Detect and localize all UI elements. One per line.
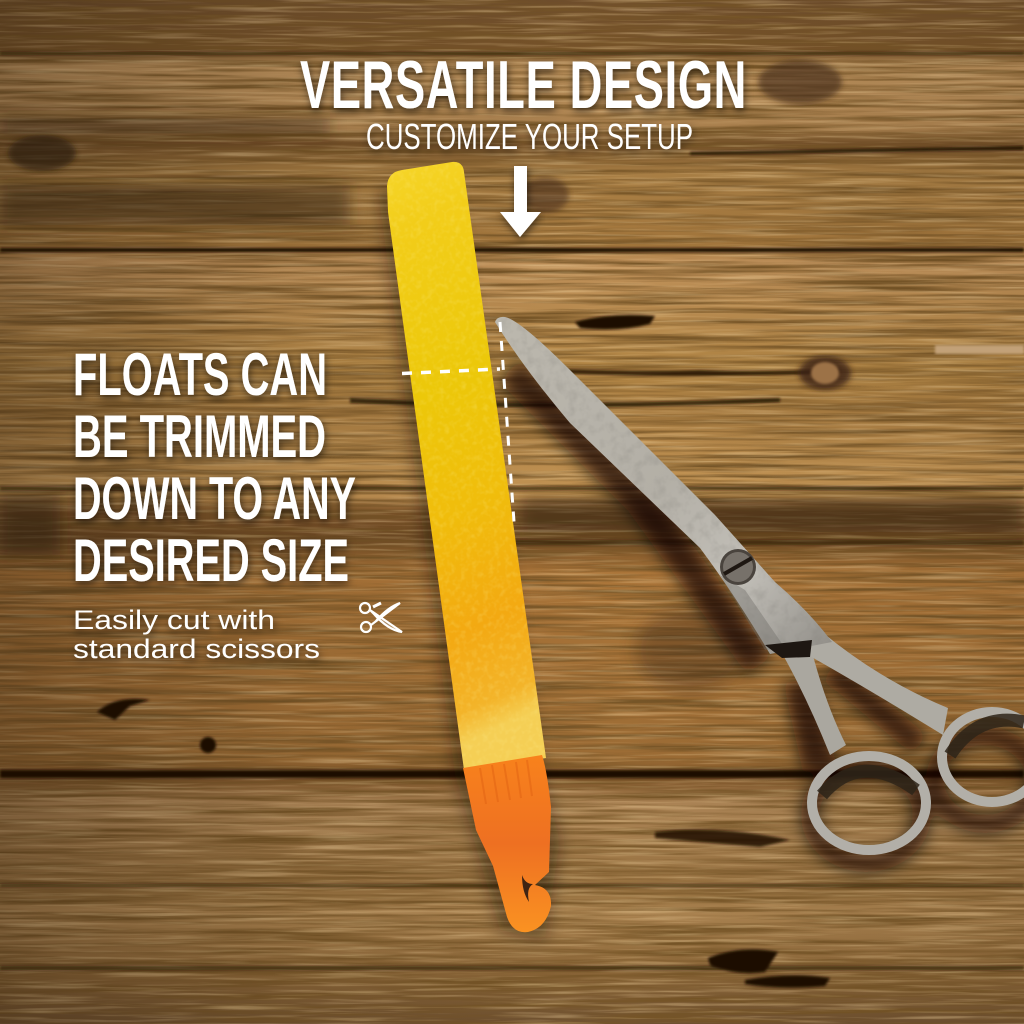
ring handle left [812, 756, 926, 850]
foam body [387, 162, 546, 770]
arrow pointing down [500, 166, 541, 237]
dark underside [765, 640, 812, 658]
scissors [495, 317, 1024, 850]
icon: scissors [360, 603, 402, 632]
lower handle [783, 652, 846, 755]
supporting text: standard scissors [73, 634, 320, 664]
main text block: DOWN TO ANY [73, 465, 356, 532]
float shadow [378, 175, 560, 940]
blade texture [495, 317, 832, 654]
ring handle right [942, 712, 1024, 802]
upper handle [775, 632, 948, 735]
main text block: DESIRED SIZE [73, 527, 349, 594]
subtitle: CUSTOMIZE YOUR SETUP [366, 116, 693, 157]
main text block: BE TRIMMED [73, 403, 326, 470]
main text block [73, 341, 356, 594]
title: VERSATILE DESIGN [300, 47, 747, 123]
foam texture [387, 162, 546, 770]
dashed vertical guide line [500, 322, 514, 522]
pivot screw [720, 549, 756, 585]
dashed horizontal cut line [402, 369, 500, 374]
yellow foam float with orange hook tip [387, 162, 551, 932]
supporting text [73, 605, 320, 664]
blade inner shade [720, 575, 785, 650]
main text block: FLOATS CAN [73, 341, 327, 408]
supporting text: Easily cut with [73, 605, 275, 635]
orange tip [463, 755, 551, 932]
blade [495, 317, 832, 654]
scissors shadow [510, 370, 1024, 863]
knots [758, 60, 842, 104]
